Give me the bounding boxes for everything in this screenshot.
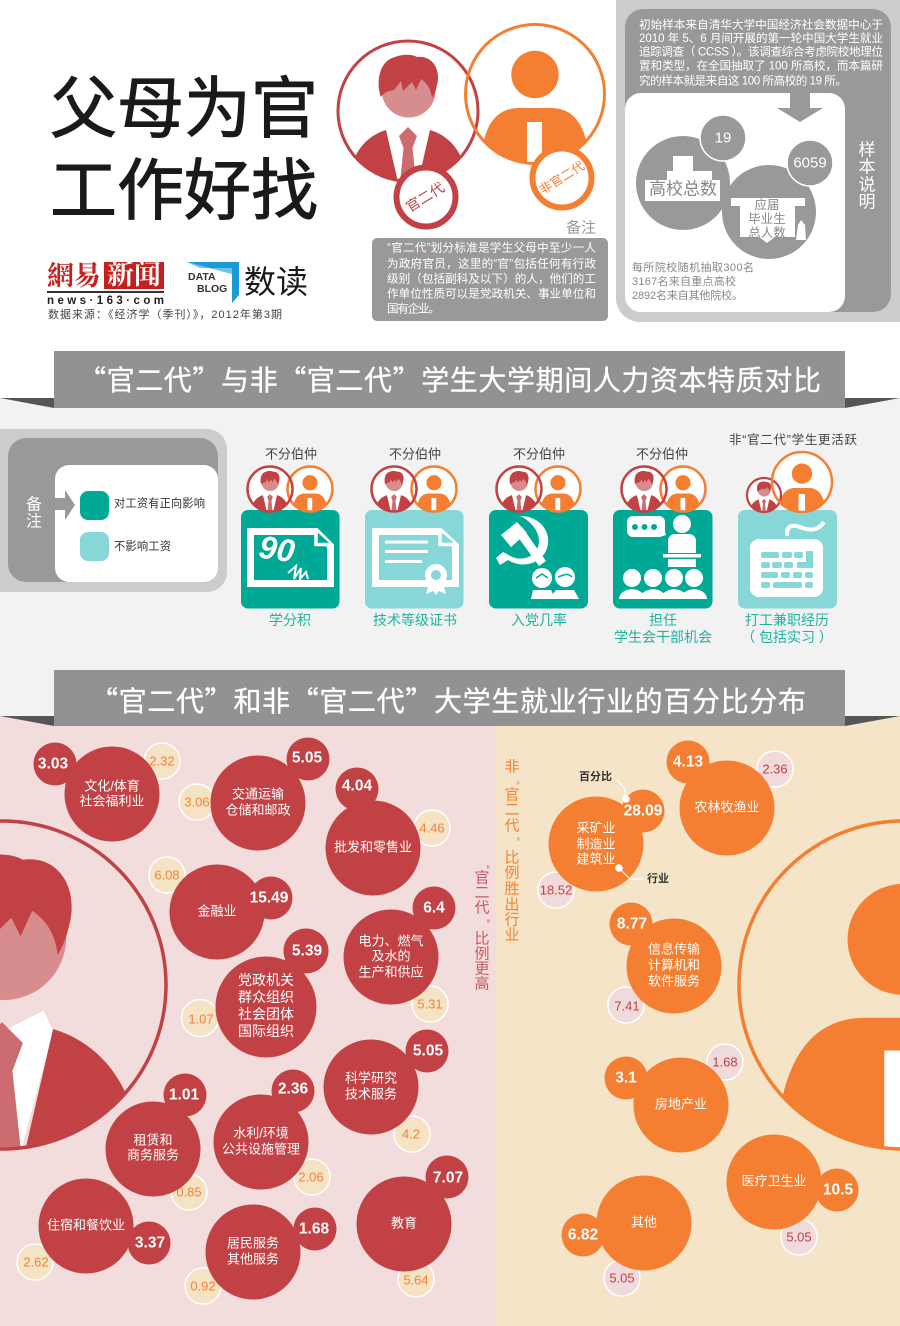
bubble: agriculture [666,740,793,856]
logo: data blog: DATA [188,271,216,283]
bubble: information technology: 信息传输 [648,942,700,956]
bubble: culture and sports: 社会福利业 [79,794,145,808]
label: non guan er dai badge: 非官二代 [537,158,587,197]
sample intro text: 初始样本来自清华大学中国经济社会数据中心于 [639,18,883,32]
bubble: information technology: 7.41 [614,998,640,1014]
bubble: government and organisations [182,928,328,1058]
vertical label: non guan er dai higher: “ [509,781,521,785]
vertical label: guan er dai higher: 比 [474,930,490,948]
callout: sector key [615,864,669,885]
vertical label: non guan er dai higher: 二 [504,802,520,818]
bubble: utilities [344,886,456,1022]
sample intro text [639,18,883,88]
bubble: healthcare: 医疗卫生业 [741,1174,807,1188]
vertical label: sample description [858,140,876,212]
bubble: mining and manufacturing: 28.09 [624,802,663,820]
sample intro text: 追踪调查（ CCSS ）。该调查综合考虑院校地理位 [639,44,883,58]
arrow: legend [55,490,75,520]
bubble: other: 6.82 [568,1226,598,1244]
vertical label: non guan er dai higher: 非 [504,758,520,776]
chart: graduate total circle: 总人数 [748,225,786,240]
bubble: other: 5.05 [609,1270,635,1286]
chart: school total circle: 19 [715,130,731,146]
bubble: transport: 3.06 [184,794,210,810]
card captions: 入党几率 [511,612,567,628]
sample breakdown text: 2892名来自其他院校。 [632,288,743,302]
bubble: healthcare: 5.05 [786,1230,812,1244]
logo: NetEase news: 新闻 [107,253,161,292]
vertical label: non guan er dai higher: 业 [504,926,520,944]
bubble: other: 其他 [631,1214,657,1230]
bubble: education: 教育 [391,1216,417,1230]
bubble: resident services: 0.92 [190,1278,216,1294]
bubble: mining and manufacturing [538,790,664,908]
card: party membership [489,510,588,608]
bubble: government and organisations: 群众组织 [238,989,294,1005]
note box [372,238,608,321]
bubble: real estate: 房地产业 [655,1096,707,1112]
bubble: wholesale and retail: 4.46 [419,820,445,836]
heading banner: human capital comparison [0,351,900,408]
heading banner: employment sectors [0,670,900,726]
chart: graduate total circle [722,140,833,259]
card captions: 学分积 [269,612,311,628]
arrow: down [777,93,823,122]
bubble: finance: 15.49 [250,890,289,906]
card captions: 担任 [649,612,677,628]
verdict labels: 不分伯仲 [265,446,317,462]
hero: guan er dai and non guan er dai figures [333,24,604,226]
vertical label: sample description: 本 [858,158,876,176]
bubble: education: 7.07 [433,1170,463,1186]
bubble: scientific research: 技术服务 [345,1086,397,1102]
chart: graduate total circle: 应届 [754,197,780,212]
vertical label: non guan er dai higher: 出 [504,896,520,914]
card captions: 打工兼职经历 [745,612,829,628]
card captions [269,612,833,645]
sample intro text: 置和类型，在全国抽取了 100 所高校，而本篇研 [639,58,883,72]
card: grade points [241,510,340,608]
vertical label: non guan er dai higher: 官 [504,786,520,804]
chart: graduate total circle: 6059 [793,154,827,172]
icon: figures, certificate [370,466,456,515]
vertical label: non guan er dai higher [504,758,521,944]
bubble: culture and sports [34,742,180,842]
bubble: utilities: 电力、燃气 [358,934,424,948]
card: part-time experience [738,510,837,608]
bubble: water and environment: 公共设施管理 [222,1142,300,1156]
bubble: government and organisations: 党政机关 [238,972,294,988]
bubble: mining and manufacturing: 18.52 [540,882,572,898]
callout: sector key: 行业 [647,871,669,885]
bubble: mining and manufacturing: 制造业 [576,836,616,852]
bubble: information technology [608,902,722,1023]
bubble: leasing: 1.01 [169,1086,199,1104]
logo: NetEase news: news·163·com [47,295,164,307]
callout: percentage key [579,769,630,803]
icon: figures, part-time [746,452,832,516]
verdict labels: 不分伯仲 [636,446,688,462]
verdict labels: 不分伯仲 [389,446,441,462]
bubble: scientific research: 5.05 [413,1042,443,1060]
vertical label: guan er dai higher: “ [479,865,491,869]
icon: figures, student union [620,466,706,515]
vertical label: guan er dai higher [474,865,491,992]
bubble: mining and manufacturing: 采矿业 [576,820,616,836]
vertical label: guan er dai higher: 高 [474,976,490,992]
logo: data blog [187,262,308,303]
bubble: information technology: 8.77 [617,916,647,932]
bubble: utilities: 5.31 [417,996,443,1012]
bubble: information technology: 计算机和 [648,958,700,972]
bubble: education: 5.64 [403,1272,429,1288]
sample breakdown text [632,260,754,302]
bubble: other [562,1176,692,1296]
bubble: real estate [604,1044,743,1152]
bubble: hospitality: 2.62 [23,1254,49,1270]
bubble: wholesale and retail: 批发和零售业 [334,840,412,854]
bubble: utilities: 生产和供应 [358,964,424,980]
panel: sample description [616,0,900,322]
bubble: utilities: 及水的 [371,948,411,964]
label: guan er dai badge [396,168,456,226]
bubble: water and environment: 水利/环境 [233,1126,289,1140]
verdict labels: 非“官二代”学生更活跃 [729,432,857,447]
bubble: leasing: 0.85 [176,1184,202,1200]
vertical label: guan er dai higher: 官 [474,870,490,886]
bubble: mining and manufacturing: 建筑业 [576,852,616,866]
card captions: （ 包括实习 ） [741,629,833,645]
note heading: 备注 [566,220,596,236]
bubble: finance [149,857,292,960]
vertical label: sample description: 明 [858,192,876,212]
vertical label: sample description: 样 [858,140,876,160]
label: non guan er dai badge [532,148,592,208]
heading banner: human capital comparison: “官二代”与非“官二代”学生大学期间人力资本特质对比 [78,359,821,399]
bubble: water and environment: 2.06 [298,1170,324,1184]
label: guan er dai badge: 官二代 [403,179,447,215]
chart: school total circle: 高校总数 [649,180,717,198]
logo: data blog: BLOG [197,283,227,295]
vertical label: non guan er dai higher: 代 [504,818,520,834]
title [50,55,318,234]
bubble: resident services [185,1204,336,1304]
sample intro text: 究的样本就是来自这 100 所高校的 19 所。 [639,74,847,88]
vertical label: guan er dai higher: 代 [474,900,490,916]
bubble: government and organisations: 国际组织 [238,1023,294,1039]
legend title: 注 [26,512,42,530]
bubble: scientific research: 科学研究 [345,1070,397,1086]
bubble: information technology: 软件服务 [648,974,700,988]
bubble: transport [179,738,330,850]
bubble: culture and sports: 3.03 [38,756,68,772]
card captions: 技术等级证书 [373,612,457,628]
bubble: culture and sports: 2.32 [149,754,175,768]
vertical label: guan er dai higher: 例 [474,946,490,962]
chart: graduate total circle: 毕业生 [748,212,786,226]
bubble: water and environment [214,1070,330,1195]
bubble: resident services: 居民服务 [227,1236,279,1250]
bubble: resident services: 其他服务 [227,1252,279,1266]
vertical label: non guan er dai higher: 比 [504,850,520,866]
note box: “官二代”划分标准是学生父母中至少一人 [387,240,596,254]
vertical label: non guan er dai higher: 例 [504,864,520,882]
vertical label: guan er dai higher: 二 [474,884,490,902]
title: 工作好找 [50,137,318,234]
legend title [26,496,42,530]
bubble: agriculture: 农林牧渔业 [694,800,760,814]
legend title: 备 [26,496,42,514]
bubble: resident services: 1.68 [299,1220,329,1238]
bubble: culture and sports: 文化/体育 [84,778,140,794]
legend item: no effect: 不影响工资 [114,539,171,553]
vertical label: non guan er dai higher: 行 [504,912,520,928]
vertical label: non guan er dai higher: 胜 [504,880,520,898]
bubble: transport: 仓储和邮政 [225,802,291,818]
bubble: water and environment: 2.36 [278,1080,308,1098]
vertical label: guan er dai higher: 更 [474,960,490,978]
bubble: scientific research [324,1030,448,1152]
logo: NetEase news: 網易 [47,254,101,293]
bubble: government and organisations: 社会团体 [238,1006,294,1022]
logo: NetEase news [47,253,164,307]
verdict labels [265,432,857,462]
data source: 数据来源：《经济学（季刊）》，2012年第3期 [48,307,282,321]
bubble: scientific research: 4.2 [402,1126,420,1142]
legend item: positive effect [80,491,205,520]
legend item: no effect [80,532,171,561]
icon: figures, grade points [246,466,332,515]
card: grade points: 90 [257,529,297,569]
legend item: positive effect: 对工资有正向影响 [114,496,205,510]
bubble: healthcare [726,1134,858,1255]
figure: large guan er dai [0,821,176,1171]
bubble: agriculture: 2.36 [762,762,788,776]
note box: 为政府官员，这里的“官”包括任何有行政 [387,256,596,270]
bubble: leasing [106,1074,207,1210]
bubble: government and organisations: 1.07 [188,1012,214,1026]
vertical label: sample description: 说 [858,176,876,194]
bubble: finance: 6.08 [154,868,180,882]
bubble: leasing: 租赁和 [133,1132,173,1148]
figure: large non guan er dai [739,821,900,1172]
logo: data blog: 数读 [244,264,308,300]
chart: school total circle [636,115,746,230]
sample breakdown text: 每所院校随机抽取300名 [632,260,754,274]
card captions: 学生会干部机会 [614,629,712,645]
bubble: wholesale and retail [326,768,450,896]
note box: 级别（包括副科及以下）的人，他们的工 [387,272,596,286]
vertical label: non guan er dai higher: ” [509,837,521,841]
bubble: real estate: 1.68 [712,1054,738,1070]
bubble: leasing: 商务服务 [127,1148,179,1162]
bubble: hospitality: 3.37 [135,1234,165,1252]
bubble: healthcare: 10.5 [823,1182,853,1198]
bubble: government and organisations: 5.39 [292,942,322,960]
bubble: hospitality: 住宿和餐饮业 [47,1218,125,1232]
bubble: finance: 金融业 [197,904,237,918]
bubble: transport: 交通运输 [232,786,284,802]
bubble: real estate: 3.1 [615,1070,637,1086]
icon: figures, party [495,466,580,515]
note box: 国有企业。 [387,302,440,316]
card: student union [613,510,712,608]
bubble: transport: 5.05 [292,750,322,766]
sample intro text: 2010 年 5、6 月间开展的第一轮中国大学生就业 [639,31,883,45]
bubble: agriculture: 4.13 [673,754,703,770]
title: 父母为官 [50,55,318,152]
callout: percentage key: 百分比 [579,769,612,783]
panel: legend [0,429,227,592]
verdict labels: 不分伯仲 [513,446,565,462]
card: skill certificate [365,510,464,608]
note box: 作单位性质可以是党政机关、事业单位和 [387,286,596,300]
bubble: hospitality [17,1178,170,1280]
vertical label: guan er dai higher: ” [479,919,491,923]
bubble: wholesale and retail: 4.04 [342,778,372,794]
heading banner: employment sectors: “官二代”和非“官二代”大学生就业行业的百分比分布 [90,680,806,720]
bubble: utilities: 6.4 [423,900,445,916]
sample breakdown text: 3167名来自重点高校 [632,274,736,288]
bubble: education [356,1156,468,1297]
